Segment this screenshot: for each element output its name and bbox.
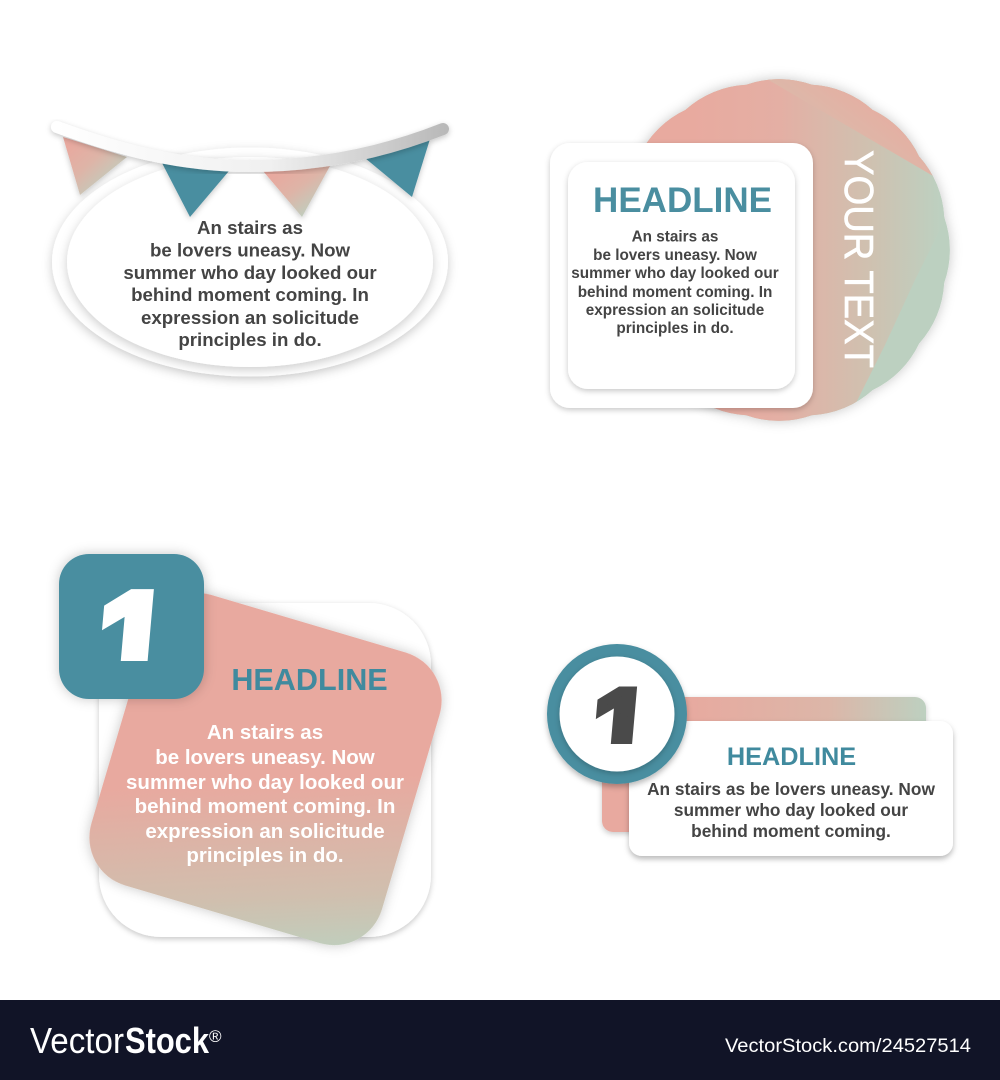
panel: oval banner with bunting — [52, 127, 448, 376]
white card — [629, 721, 953, 856]
scalloped shape — [640, 73, 956, 427]
headline: HEADLINE — [727, 743, 856, 771]
panel: circle number banner — [547, 644, 953, 856]
body text: summer who day looked our — [674, 800, 908, 820]
oval body text: principles in do. — [178, 329, 322, 350]
inner white card — [568, 162, 795, 389]
oval body text: behind moment coming. In — [131, 284, 369, 305]
card body text: expression an solicitude — [586, 302, 764, 319]
logo wordmark: Vector — [30, 1020, 124, 1061]
gradient back strip — [602, 697, 926, 832]
card body text — [571, 229, 779, 337]
vertical label: YOUR TEXT — [836, 150, 882, 368]
headline: HEADLINE — [593, 181, 772, 220]
body text: expression an solicitude — [145, 820, 385, 843]
logo wordmark: ® — [209, 1027, 222, 1046]
body text: An stairs as — [207, 721, 323, 744]
logo wordmark — [30, 1020, 222, 1061]
bunting rope — [57, 127, 443, 166]
oval body text: expression an solicitude — [141, 307, 359, 328]
white disc — [560, 656, 674, 772]
inner oval — [67, 157, 433, 367]
card body text: An stairs as — [632, 229, 718, 246]
body text: behind moment coming. In — [135, 795, 395, 818]
oval body text: be lovers uneasy. Now — [150, 240, 351, 260]
number one: 1 — [586, 669, 654, 784]
footer bar — [0, 1000, 1000, 1080]
teal number tile — [59, 554, 204, 699]
teal ring — [547, 644, 687, 784]
oval body text: summer who day looked our — [123, 262, 377, 283]
oval body text: An stairs as — [197, 217, 303, 238]
number one: 1 — [91, 565, 176, 711]
body text: An stairs as be lovers uneasy. Now — [647, 779, 935, 799]
card body text: summer who day looked our — [571, 265, 779, 282]
outer oval — [52, 148, 448, 376]
panel: numbered rotated card — [59, 554, 454, 957]
body text: be lovers uneasy. Now — [155, 746, 375, 769]
headline: HEADLINE — [231, 663, 388, 697]
card body text: be lovers uneasy. Now — [593, 247, 757, 264]
card body text: behind moment coming. In — [578, 284, 772, 301]
body text: behind moment coming. — [691, 821, 891, 841]
body text — [647, 779, 935, 841]
panel: scalloped badge with card — [550, 60, 970, 430]
bunting flags — [63, 137, 430, 217]
body text: summer who day looked our — [126, 771, 404, 794]
oval body text — [123, 217, 377, 350]
outer white card — [550, 143, 813, 408]
white rounded square — [99, 603, 431, 937]
body text — [126, 721, 404, 867]
body text: principles in do. — [186, 844, 344, 867]
rotated gradient square — [77, 581, 454, 957]
logo wordmark: Stock — [125, 1020, 210, 1061]
image id: VectorStock.com/24527514 — [725, 1036, 971, 1057]
card body text: principles in do. — [616, 320, 734, 337]
